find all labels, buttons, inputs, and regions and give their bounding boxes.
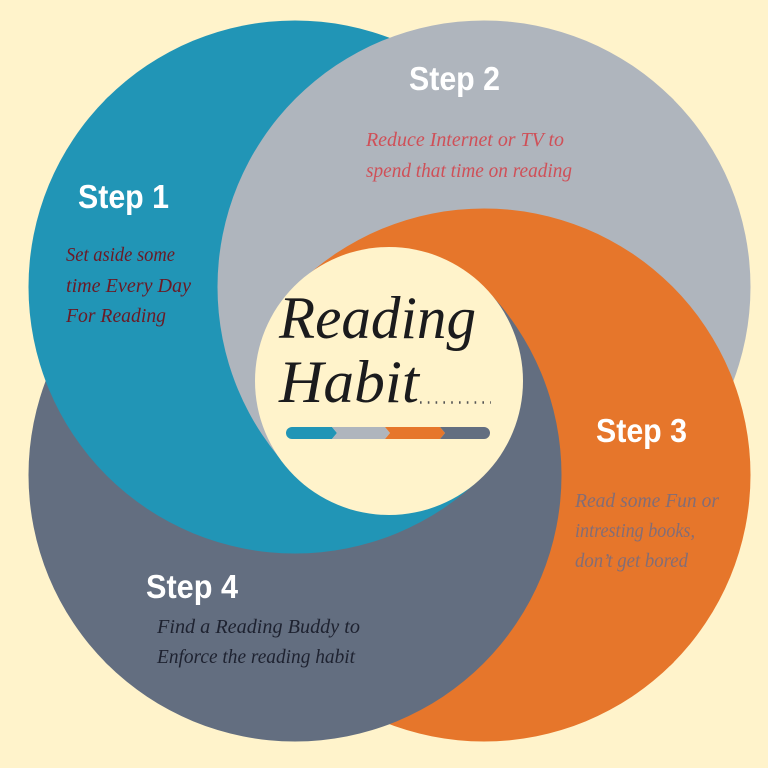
center circle — [255, 247, 523, 515]
panel: step 1 — [65, 178, 191, 327]
panel: step 2: Reduce Internet or TV to — [365, 129, 564, 151]
four colour progress bar — [286, 427, 490, 439]
panel: step 1: Step 1 — [78, 178, 169, 215]
title — [278, 285, 476, 415]
panel: step 2: spend that time on reading — [366, 160, 572, 182]
panel: step 3: Read some Fun or — [574, 490, 719, 512]
panel: step 4: Step 4 — [146, 568, 239, 605]
panel: step 3 — [574, 412, 719, 572]
panel: step 1: time Every Day — [66, 275, 191, 297]
panel: step 3: Step 3 — [596, 412, 687, 449]
panel: step 1: For Reading — [65, 305, 166, 327]
panel: step 4 — [146, 568, 360, 668]
panel: step 1: Set aside some — [66, 244, 175, 266]
title: Habit — [278, 349, 420, 415]
panel: step 3: intresting books, — [575, 520, 695, 542]
panel: step 2 — [365, 60, 572, 182]
title: Reading — [278, 285, 476, 351]
panel: step 3: don’t get bored — [575, 550, 689, 572]
panel: step 4: Find a Reading Buddy to — [156, 616, 360, 638]
panel: step 4: Enforce the reading habit — [156, 646, 355, 668]
dotted leader — [420, 401, 491, 404]
panel: step 2: Step 2 — [409, 60, 500, 97]
